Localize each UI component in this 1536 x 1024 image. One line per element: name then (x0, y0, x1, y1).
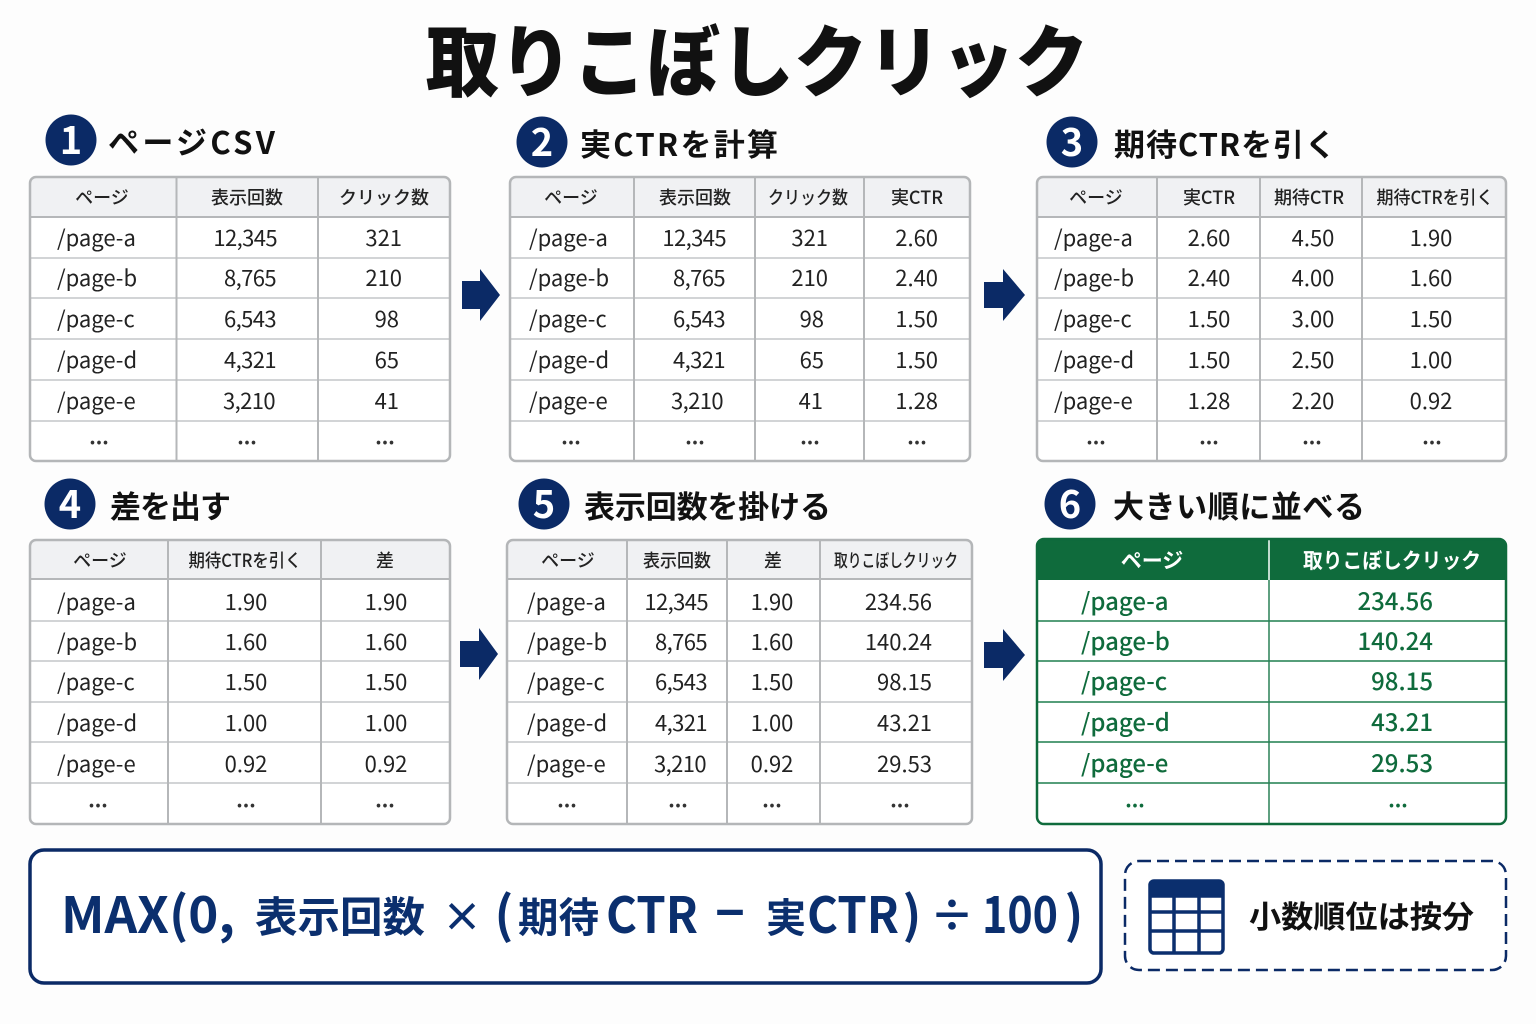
step 5 table: 0.92 (751, 747, 793, 779)
step 5 table: ... (557, 784, 577, 813)
step 4 table: /page-e (57, 747, 136, 779)
step 4 table: ... (375, 784, 395, 813)
step 1 table: クリック数 (339, 184, 429, 210)
step 4 table: 1.50 (365, 665, 407, 697)
note box (1125, 861, 1506, 970)
step 4 heading (44, 474, 231, 530)
step 5 table: ... (890, 784, 910, 813)
step 5 table: 29.53 (877, 747, 932, 779)
step 5 table: ... (668, 784, 688, 813)
step 5 table (507, 540, 972, 824)
step 5 table: 3,210 (654, 747, 706, 779)
step 1 table: 8,765 (224, 261, 276, 293)
formula box: ) (1065, 876, 1083, 948)
step 2 table: ... (907, 421, 927, 450)
step 5 table: 1.50 (751, 665, 793, 697)
step 5 table: 234.56 (865, 585, 932, 617)
step 5 table: /page-b (527, 625, 607, 657)
step 1 heading (46, 110, 276, 166)
step 3 heading: 期待CTRを引く (1114, 120, 1336, 165)
formula box: CTR (606, 876, 698, 948)
step 3 table: 1.00 (1410, 343, 1452, 375)
step 3 heading (1046, 112, 1336, 168)
step 4 table: 1.60 (225, 625, 267, 657)
step 6 result table (1036, 539, 1507, 824)
step 1 table: /page-c (57, 302, 135, 334)
step 3 table: ... (1422, 421, 1442, 450)
formula box: ÷ (930, 880, 974, 944)
step 5 table: /page-c (527, 665, 605, 697)
step 4 heading: 4 (59, 474, 81, 529)
step 5 table: /page-a (527, 585, 606, 617)
formula box: CTR (807, 876, 899, 948)
step 2 table: クリック数 (768, 184, 848, 210)
step 5 table: 98.15 (877, 665, 932, 697)
step 2 table: 4,321 (673, 343, 725, 375)
step 3 table: 1.28 (1188, 384, 1230, 416)
step 5 table: 取りこぼしクリック (834, 547, 958, 573)
formula box: 表示回数 (255, 884, 425, 945)
arrow 1 to 2 (462, 269, 500, 321)
step 4 table: ... (236, 784, 256, 813)
step 4 table: 0.92 (225, 747, 267, 779)
step 1 table: ... (375, 421, 395, 450)
formula box (30, 850, 1101, 983)
step 2 heading: 実CTRを計算 (580, 120, 778, 165)
step 1 heading: 1 (60, 110, 82, 165)
step 3 table: 2.60 (1188, 221, 1230, 253)
step 3 table: ページ (1069, 184, 1123, 210)
step 4 table: ... (88, 784, 108, 813)
formula box: × (442, 885, 482, 943)
step 1 table: 210 (365, 261, 402, 293)
step 3 table: 1.50 (1188, 343, 1230, 375)
formula box: 100 (982, 876, 1058, 948)
step 3 table: /page-e (1054, 384, 1133, 416)
step 2 table: 2.60 (895, 221, 938, 253)
step 2 table: ページ (544, 184, 598, 210)
step 1 table: ... (237, 421, 257, 450)
step 3 table: ... (1086, 421, 1106, 450)
step 2 heading (516, 112, 778, 168)
step 6 result table: ページ (1121, 545, 1183, 575)
step 6 heading (1044, 474, 1365, 530)
step 4 table: 1.60 (365, 625, 407, 657)
formula box: 期待 (518, 884, 599, 944)
step 2 table: ... (800, 421, 820, 450)
step 6 result table: ... (1125, 784, 1145, 813)
step 3 table: 2.20 (1292, 384, 1334, 416)
step 5 table: 12,345 (644, 585, 708, 617)
step 2 table: 1.50 (895, 343, 938, 375)
step 6 result table: ... (1388, 784, 1408, 813)
step 6 result table: 29.53 (1371, 744, 1433, 779)
step 6 result table: /page-c (1081, 662, 1167, 697)
step 2 table: /page-b (529, 261, 609, 293)
step 5 table: 6,543 (655, 665, 707, 697)
step 1 heading: ページCSV (108, 118, 276, 163)
step 1 table: /page-d (57, 343, 137, 375)
step 5 table: 1.90 (751, 585, 793, 617)
step 1 table: 12,345 (213, 221, 277, 253)
step 5 table: 差 (764, 547, 782, 573)
step 5 table: /page-e (527, 747, 606, 779)
step 1 table: /page-e (57, 384, 136, 416)
step 5 heading: 5 (533, 474, 555, 529)
step 2 table: /page-d (529, 343, 609, 375)
step 4 table: 期待CTRを引く (188, 547, 302, 573)
step 5 table: 4,321 (655, 706, 707, 738)
step 2 table: 表示回数 (659, 184, 731, 210)
step 2 table: 210 (791, 261, 828, 293)
step 2 heading: 2 (531, 112, 553, 167)
formula box: 実 (766, 886, 806, 944)
arrow 4 to 5 (460, 628, 498, 680)
note text: 小数順位は按分 (1249, 892, 1474, 937)
step 4 table: 1.50 (225, 665, 267, 697)
step 1 table: 表示回数 (211, 184, 283, 210)
step 2 table: 2.40 (895, 261, 938, 293)
step 2 table: 1.50 (895, 302, 938, 334)
step 1 table: 4,321 (224, 343, 276, 375)
step 3 table: 1.50 (1188, 302, 1230, 334)
step 4 table: ページ (73, 547, 127, 573)
step 3 table: 2.50 (1292, 343, 1334, 375)
step 2 table: 6,543 (673, 302, 725, 334)
step 1 table (30, 177, 450, 461)
step 3 table: 1.50 (1410, 302, 1452, 334)
step 6 result table: 43.21 (1371, 703, 1433, 738)
step 4 table: 1.90 (365, 585, 407, 617)
step 3 table: 4.00 (1292, 261, 1334, 293)
step 1 table: /page-b (57, 261, 137, 293)
step 4 heading: 差を出す (110, 482, 231, 527)
step 2 table (510, 177, 970, 461)
step 2 table: /page-c (529, 302, 607, 334)
step 2 table: ... (561, 421, 581, 450)
step 3 table: 期待CTRを引く (1376, 184, 1494, 210)
step 3 table: 3.00 (1292, 302, 1334, 334)
step 1 table: /page-a (57, 221, 136, 253)
step 4 table: 1.00 (225, 706, 267, 738)
formula box: MAX(0, (61, 876, 235, 948)
step 3 table: ... (1199, 421, 1219, 450)
step 5 table: /page-d (527, 706, 607, 738)
step 5 heading: 表示回数を掛ける (584, 482, 831, 527)
formula box: ) (903, 876, 921, 948)
step 5 heading (518, 474, 831, 530)
step 3 table: ... (1302, 421, 1322, 450)
step 1 table: ページ (75, 184, 129, 210)
step 2 table: ... (685, 421, 705, 450)
step 3 table: /page-a (1054, 221, 1133, 253)
step 5 table: 1.00 (751, 706, 793, 738)
step 2 table: 実CTR (891, 184, 943, 210)
step 3 table (1037, 177, 1506, 461)
step 3 table: 2.40 (1188, 261, 1230, 293)
icon: table (1150, 880, 1223, 953)
step 3 table: /page-c (1054, 302, 1132, 334)
step 4 table: 0.92 (365, 747, 407, 779)
step 6 result table: 140.24 (1357, 622, 1433, 657)
step 2 table: 8,765 (673, 261, 725, 293)
step 5 table: ページ (541, 547, 595, 573)
step 6 result table: 98.15 (1371, 662, 1433, 697)
step 4 table: 1.90 (225, 585, 267, 617)
step 1 table: 98 (375, 302, 399, 334)
step 2 table: 3,210 (671, 384, 723, 416)
step 5 table: 1.60 (751, 625, 793, 657)
step 3 table: /page-b (1054, 261, 1134, 293)
step 4 table: /page-a (57, 585, 136, 617)
arrow 5 to 6 (984, 629, 1025, 681)
step 2 table: /page-e (529, 384, 608, 416)
step 3 table: 1.60 (1410, 261, 1452, 293)
step 1 table: 65 (375, 343, 399, 375)
step 5 table: 8,765 (655, 625, 707, 657)
step 6 result table: /page-e (1081, 744, 1168, 779)
step 6 heading: 6 (1059, 474, 1081, 529)
step 3 table: 4.50 (1292, 221, 1334, 253)
arrow 2 to 3 (984, 269, 1025, 321)
step 3 table: 実CTR (1183, 184, 1235, 210)
step 1 table: ... (89, 421, 109, 450)
formula box: − (715, 874, 745, 946)
step 3 table: 1.90 (1410, 221, 1452, 253)
step 4 table (30, 540, 450, 824)
step 2 table: 41 (799, 384, 823, 416)
step 3 table: 期待CTR (1274, 184, 1344, 210)
step 1 table: 41 (375, 384, 399, 416)
step 5 table: 43.21 (877, 706, 932, 738)
step 2 table: /page-a (529, 221, 608, 253)
step 5 table: 表示回数 (643, 547, 711, 573)
step 2 table: 98 (800, 302, 824, 334)
step 3 heading: 3 (1061, 112, 1083, 167)
step 2 table: 1.28 (895, 384, 938, 416)
step 4 table: /page-b (57, 625, 137, 657)
step 4 table: /page-d (57, 706, 137, 738)
step 3 table: /page-d (1054, 343, 1134, 375)
step 4 table: 1.00 (365, 706, 407, 738)
step 4 table: 差 (376, 547, 394, 573)
step 2 table: 12,345 (662, 221, 726, 253)
step 1 table: 6,543 (224, 302, 276, 334)
step 6 heading: 大きい順に並べる (1113, 482, 1365, 527)
step 4 table: /page-c (57, 665, 135, 697)
step 6 result table: /page-a (1081, 582, 1169, 617)
step 6 result table: /page-d (1081, 703, 1170, 738)
step 5 table: 140.24 (865, 625, 932, 657)
formula box: ( (495, 876, 513, 948)
step 2 table: 65 (800, 343, 824, 375)
step 1 table: 3,210 (223, 384, 275, 416)
step 1 table: 321 (365, 221, 402, 253)
step 3 table: 0.92 (1410, 384, 1452, 416)
step 6 result table: 取りこぼしクリック (1303, 545, 1481, 575)
step 6 result table: 234.56 (1357, 582, 1433, 617)
title: 取りこぼしクリック (426, 1, 1088, 113)
step 2 table: 321 (791, 221, 828, 253)
step 6 result table: /page-b (1081, 622, 1170, 657)
step 5 table: ... (762, 784, 782, 813)
